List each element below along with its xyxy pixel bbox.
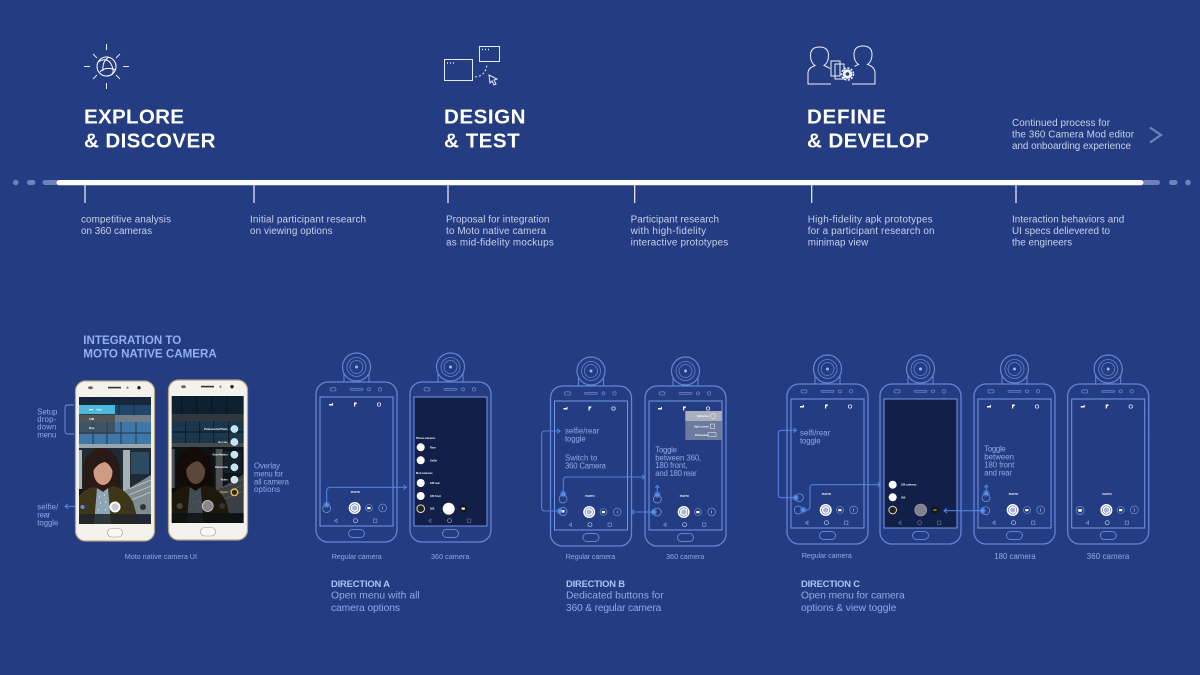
text: continued process: Continued process for [1012,118,1111,129]
caption: direction C regular: Regular camera [802,551,852,560]
heading: explore and discover [84,106,216,152]
direction B 360 camera phone [645,357,726,546]
direction A 360 camera phone: 180 rear [430,481,440,485]
text: interaction behaviors: UI specs delievered to [1012,226,1110,237]
text: proposal: as mid-fidelity mockups [446,238,554,249]
photo phone: native camera: Auto [96,408,102,412]
caption: direction A regular: Regular camera [332,552,382,561]
photo phone: native camera [76,381,154,541]
heading: design and test [444,106,526,152]
direction B 360 camera phone: Split screen [694,424,709,428]
annotation: overlay menu: Overlay [254,462,280,471]
text: continued process: the 360 Camera Mod editor [1012,129,1135,140]
annotation: setup menu: down [37,423,56,432]
direction A 360 camera phone: Rear [430,445,436,449]
direction C 180 camera phone [974,355,1055,544]
annotation: setup menu: menu [37,430,56,439]
caption: direction A 360: 360 camera [431,552,469,561]
text: initial research [250,215,366,237]
annotation: 180 camera toggle label: and rear [984,468,1012,477]
text: proposal [446,215,554,249]
icon: design windows and cursor [444,46,500,85]
text: direction A: DIRECTION A [331,578,390,589]
heading: integration to moto native camera [83,334,217,361]
annotation: 180 camera toggle label: Toggle [984,444,1006,453]
text: direction A: Open menu with all [331,590,420,602]
annotation: direction B left phone labels [565,427,607,470]
photo phone: overlay menu: Photo [220,490,228,494]
photo phone: overlay menu: Video [221,478,228,482]
annotation: 180 camera toggle label: 180 front [984,460,1015,469]
direction C menu phone: 360 [901,495,906,499]
text: direction B: Dedicated buttons for [566,590,664,602]
text: interaction behaviors: the engineers [1012,238,1072,249]
heading: define and develop: DEFINE [807,106,886,128]
direction A regular camera phone [316,353,397,542]
text: high fidelity apk: for a participant research on [808,226,934,237]
heading: explore and discover: & DISCOVER [84,130,216,152]
text: direction A: camera options [331,603,400,614]
heading: design and test: DESIGN [444,106,526,128]
direction A 360 camera phone: Selfie [430,458,437,462]
photo phone: native camera: 16M [89,417,94,421]
annotation: direction B right phone labels: 180 front, [655,461,687,470]
text: participant research: with high-fidelity [630,226,706,237]
direction C menu phone: 180 cameras [901,483,917,487]
annotation: direction B left phone labels: Switch to [565,453,598,462]
text: participant research: interactive prototypes [631,238,728,249]
annotation: direction B right phone labels: Toggle [655,446,677,455]
annotation: direction B left phone labels: toggle [565,435,586,444]
photo phone: overlay menu: Go Live [218,440,228,444]
text: participant research [630,215,728,249]
annotation: direction B right phone labels: and 180 rear [655,469,697,478]
arrow: 180 camera up toggle [983,485,990,497]
annotation: overlay menu: menu for [254,469,283,478]
text: direction C: options & view toggle [801,603,897,614]
heading: define and develop: & DEVELOP [807,130,929,152]
text: direction B: 360 & regular camera [566,603,662,614]
annotation: overlay menu: all camera [254,477,290,486]
annotation: direction C selfie label: selfi/rear [800,429,831,438]
annotation: selfie rear toggle: selfie/ [37,503,59,512]
text: interaction behaviors [1012,215,1124,249]
direction B regular camera phone: PHOTO [585,494,594,498]
text: high fidelity apk [808,215,934,249]
arrows: direction C connectors [778,428,986,514]
text: participant research: Participant research [631,215,719,226]
text: proposal: to Moto native camera [446,226,546,237]
direction C 180 camera phone: PHOTO [1009,492,1018,496]
annotation: overlay menu: options [254,485,280,494]
text: continued process: and onboarding experience [1012,141,1132,152]
heading: design and test: & TEST [444,130,520,152]
icon: define people, devices and gear [808,46,875,84]
text: interaction behaviors: Interaction behaviors and [1012,215,1124,226]
timeline [13,180,1191,203]
direction A regular camera phone: PHOTO [351,490,360,494]
text: continued process [1012,118,1135,152]
direction A 360 camera phone: 360 [430,507,435,511]
annotation: selfie rear toggle: toggle [37,518,58,527]
caption: moto native camera UI: Moto native camera UI [125,552,197,561]
text: direction A [331,578,420,614]
arrows: direction B connectors [542,429,661,515]
text: direction C [801,578,905,614]
text: direction C: DIRECTION C [801,578,860,589]
caption: direction B regular: Regular camera [566,552,615,561]
direction C regular camera phone [787,355,868,544]
photo phone: overlay menu: Professional Photo [204,427,228,431]
text: direction B [566,578,664,614]
text: competitive analysis: on 360 cameras [81,226,152,237]
caption: 360 camera: 360 camera [1087,552,1130,561]
text: high fidelity apk: High-fidelity apk prototypes [808,215,933,226]
heading: define and develop [807,106,929,152]
text: direction B: DIRECTION B [566,578,625,589]
text: competitive analysis [81,215,171,237]
annotation: direction B left phone labels: 360 Camera [565,461,607,470]
icon: explore globe with rays [84,44,129,89]
direction B 360 camera phone: Panoramic [695,433,709,437]
annotation: overlay menu [254,462,290,494]
direction B regular camera phone [550,357,632,546]
annotation: setup menu: Setup [37,407,58,416]
arrow: continue chevron [1150,128,1161,142]
photo phone: overlay menu: Panorama [215,465,228,469]
photo phone: overlay menu [168,380,248,540]
annotation: selfie rear toggle: rear [37,510,51,519]
direction B 360 camera phone: Spherical [697,414,709,418]
heading: explore and discover: EXPLORE [84,106,184,128]
direction A 360 camera phone: Mod cameras [416,471,433,475]
annotation: direction C selfie label: toggle [800,437,821,446]
text: initial research: on viewing options [250,226,333,237]
arrow: direction A menu connector [323,485,406,508]
heading: integration to moto native camera: INTEGRATION TO [83,334,181,347]
annotation: selfie rear toggle [37,503,82,527]
heading: integration to moto native camera: MOTO NATIVE CAMERA [83,348,217,361]
annotation: direction B right phone labels: between 360, [655,454,701,463]
text: competitive analysis: competitive analysis [81,215,171,226]
direction B 360 camera phone: PHOTO [680,494,689,498]
caption: 180 camera: 180 camera [994,552,1036,561]
direction C 360 camera phone [1068,355,1149,544]
direction C menu phone [880,355,961,544]
annotation: direction C selfie label [800,429,831,446]
annotation: direction B left phone labels: selfie/rear [565,427,600,436]
direction A 360 camera phone [410,353,491,542]
annotation: 180 camera toggle label: between [984,452,1014,461]
direction C regular camera phone: PHOTO [822,492,831,496]
text: proposal: Proposal for integration [446,215,550,226]
direction A 360 camera phone: 180 front [430,494,441,498]
annotation: setup menu [37,405,74,439]
annotation: 180 camera toggle label [984,444,1015,477]
text: direction C: Open menu for camera [801,590,905,602]
text: high fidelity apk: minimap view [808,238,869,249]
text: initial research: Initial participant research [250,215,366,226]
direction C 360 camera phone: PHOTO [1102,492,1112,496]
caption: direction B 360: 360 camera [666,552,704,561]
photo phone: overlay menu: Slow Motion [212,452,228,456]
direction A 360 camera phone: Phone cameras [416,436,436,440]
annotation: setup menu: drop- [37,415,57,424]
annotation: direction B right phone labels [655,446,701,478]
photo phone: native camera: 8mp [89,426,95,430]
